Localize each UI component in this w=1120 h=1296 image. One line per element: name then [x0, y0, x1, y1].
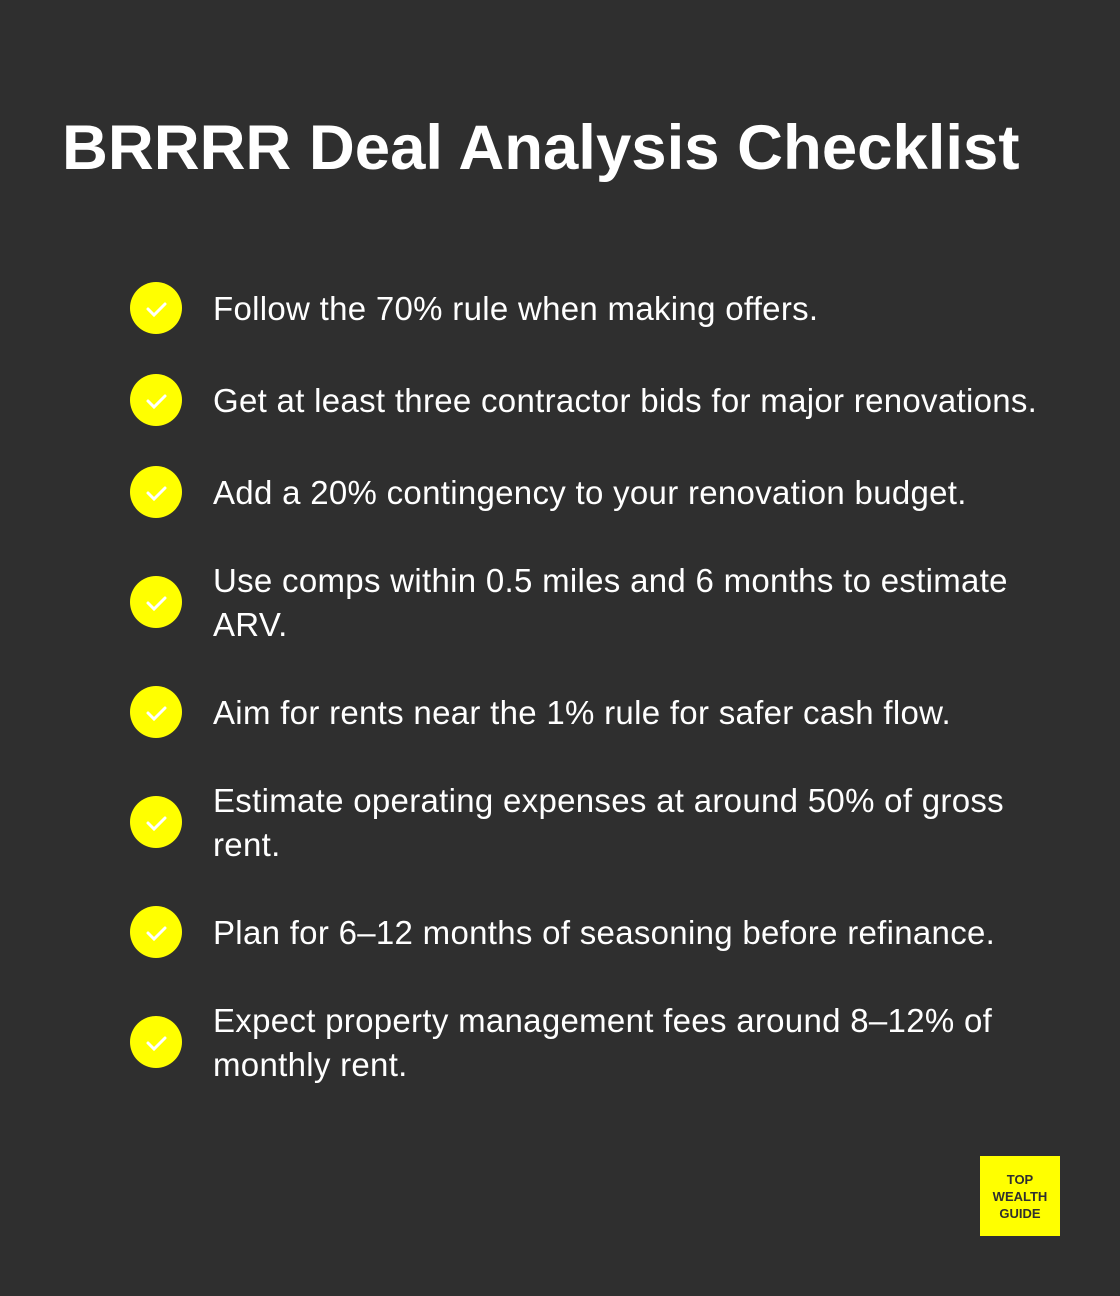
item 6: [130, 782, 1004, 863]
text: [213, 782, 1004, 863]
item 5: [130, 686, 951, 738]
text: Add a 20% contingency to your renovation budget.: [213, 474, 967, 511]
item 3: [130, 466, 967, 518]
logo: [980, 1156, 1060, 1236]
item 1: [130, 282, 818, 334]
item 8: [130, 1002, 992, 1083]
text: Get at least three contractor bids for major renovations.: [213, 382, 1037, 419]
icon: check: [130, 576, 182, 628]
icon: check: [130, 796, 182, 848]
text: [213, 1002, 992, 1083]
text: [213, 562, 1008, 643]
icon: check: [130, 282, 182, 334]
icon: check: [130, 1016, 182, 1068]
text: Follow the 70% rule when making offers.: [213, 290, 818, 327]
item 2: [130, 374, 1037, 426]
text: ARV.: [213, 606, 288, 643]
text: Plan for 6–12 months of seasoning before refinance.: [213, 914, 995, 951]
title: BRRRR Deal Analysis Checklist: [62, 113, 1020, 183]
text: Aim for rents near the 1% rule for safer cash flow.: [213, 694, 951, 731]
text: monthly rent.: [213, 1046, 408, 1083]
text: rent.: [213, 826, 281, 863]
logo: GUIDE: [999, 1206, 1041, 1220]
text: Estimate operating expenses at around 50% of gross: [213, 782, 1004, 819]
icon: check: [130, 466, 182, 518]
icon: check: [130, 906, 182, 958]
item 4: [130, 562, 1008, 643]
text: Expect property management fees around 8–12% of: [213, 1002, 992, 1039]
icon: check: [130, 374, 182, 426]
logo: TOP: [1007, 1172, 1033, 1186]
icon: check: [130, 686, 182, 738]
item 7: [130, 906, 995, 958]
logo: WEALTH: [993, 1188, 1047, 1204]
text: Use comps within 0.5 miles and 6 months to estimate: [213, 562, 1008, 599]
